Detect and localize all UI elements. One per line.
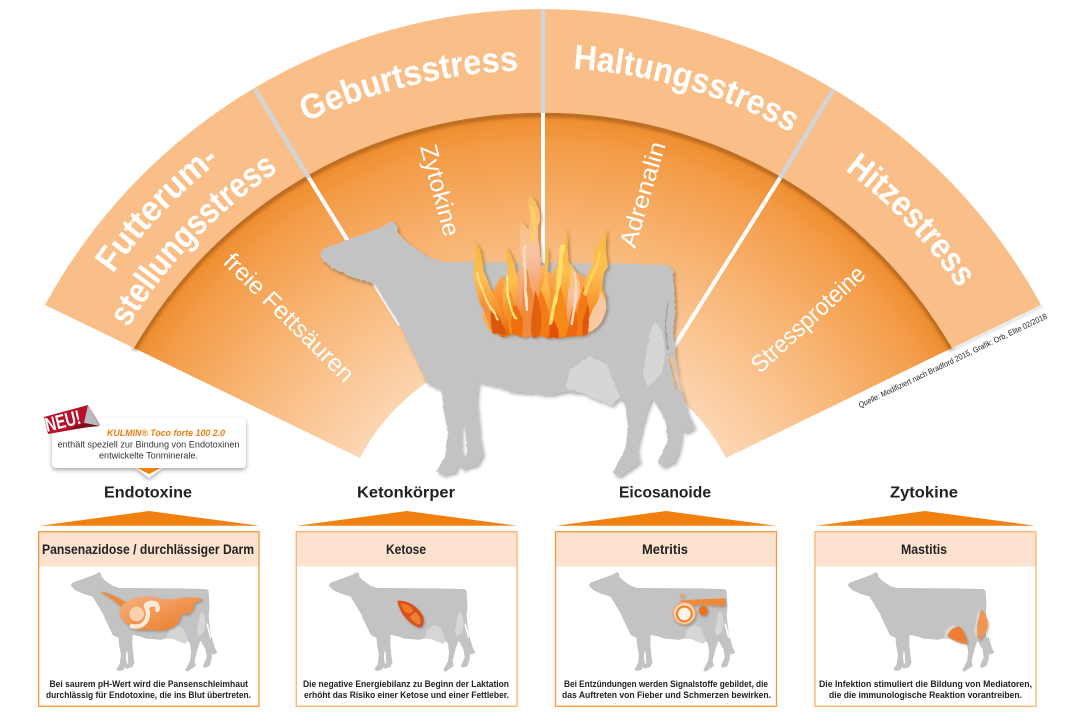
ring edge shadow	[134, 115, 952, 350]
left divider	[255, 89, 400, 325]
icon: flames	[473, 197, 607, 337]
label: Geburtsstress: Geburtsstress	[300, 52, 517, 118]
column 1: Endotoxine	[39, 484, 259, 706]
flame mid layer	[480, 267, 590, 337]
panel text	[819, 679, 1032, 701]
outer stress ring	[45, 9, 1041, 348]
cow	[329, 572, 475, 672]
column 4: Zytokine	[815, 484, 1036, 706]
badge: NEU!: NEU!	[43, 407, 83, 437]
panel title: Metritis	[642, 542, 688, 557]
icon: uterus	[673, 594, 725, 624]
label: Stressproteine: Stressproteine	[746, 261, 871, 378]
callout: KULMIN product note	[43, 405, 246, 478]
label: Zytokine: Zytokine	[414, 142, 465, 239]
panel title: Mastitis	[901, 542, 947, 557]
panel header band	[815, 532, 1036, 566]
source edge shadow	[952, 306, 1043, 350]
label: Haltungsstress: Haltungsstress	[575, 44, 796, 130]
flame highlights	[477, 207, 600, 323]
heading: Zytokine	[890, 484, 958, 502]
heading: Endotoxine	[104, 484, 192, 502]
panel text: Die negative Energiebilanz zu Beginn der Laktation	[303, 679, 509, 690]
cow	[71, 572, 217, 672]
callout text	[58, 428, 240, 462]
panel frame	[39, 532, 259, 706]
column 2: Ketonkörper	[296, 484, 517, 706]
panel text: das Auftreten von Fieber und Schmerzen bewirken.	[562, 690, 771, 701]
panel frame	[296, 532, 517, 706]
icon: inflamed udder	[947, 609, 988, 644]
panel text: durchlässig für Endotoxine, die ins Blut übertreten.	[46, 690, 251, 701]
label: Adrenalin: Adrenalin	[615, 139, 672, 251]
panel text	[303, 679, 509, 701]
heading: Eicosanoide	[619, 484, 711, 502]
source note: Quelle: Modifiziert nach Bradford 2015, Grafik: Orb, Elite 02/2018	[857, 312, 1049, 410]
callout text: enthält speziell zur Bindung von Endotoxinen	[58, 440, 240, 450]
panel text: erhöht das Risiko einer Ketose und einer Fettleber.	[304, 690, 509, 701]
arrow	[556, 511, 776, 526]
panel header band	[556, 532, 776, 566]
panel title: Ketose	[386, 542, 426, 557]
panel header band	[39, 532, 259, 566]
centre divider	[541, 9, 545, 300]
label: Futterumstellungsstress: Futterum-	[94, 153, 214, 272]
panel text: Bei saurem pH-Wert wird die Pansenschleimhaut	[50, 679, 249, 690]
cow	[589, 572, 735, 672]
panel text: Bei Entzündungen werden Signalstoffe gebildet, die	[564, 679, 768, 690]
panel text	[46, 679, 251, 701]
cow	[848, 572, 994, 672]
callout text: entwickelte Tonminerale.	[99, 450, 198, 462]
arrow	[816, 511, 1035, 526]
callout pointer	[137, 468, 161, 474]
panel title: Pansenazidose / durchlässiger Darm	[42, 542, 254, 557]
arrow	[297, 511, 517, 526]
large cow silhouette	[320, 221, 695, 477]
callout text: KULMIN® Toco forte 100 2.0	[107, 428, 226, 439]
inner signal-substance ring	[134, 113, 952, 458]
icon: liver	[397, 601, 424, 627]
panel frame	[815, 532, 1036, 706]
panel frame	[556, 532, 776, 706]
panel text: Die Infektion stimuliert die Bildung von Mediatoren,	[819, 679, 1032, 690]
panel text: die die immunologische Reaktion vorantreiben.	[829, 690, 1022, 701]
panel text	[562, 679, 771, 701]
arrow	[40, 511, 259, 526]
column 3: Eicosanoide	[556, 484, 776, 706]
stress fan diagram	[45, 9, 1049, 458]
icon: rumen and intestine	[100, 591, 203, 630]
label: freie Fettsäuren: freie Fettsäuren	[218, 248, 359, 388]
label: Futterumstellungsstress: stellungsstress	[115, 158, 276, 325]
label: Hitzestress: Hitzestress	[846, 152, 971, 286]
panel header band	[296, 532, 517, 566]
right divider	[660, 90, 833, 369]
flame core	[490, 292, 591, 337]
heading: Ketonkörper	[357, 484, 455, 502]
callout bubble	[52, 418, 246, 478]
